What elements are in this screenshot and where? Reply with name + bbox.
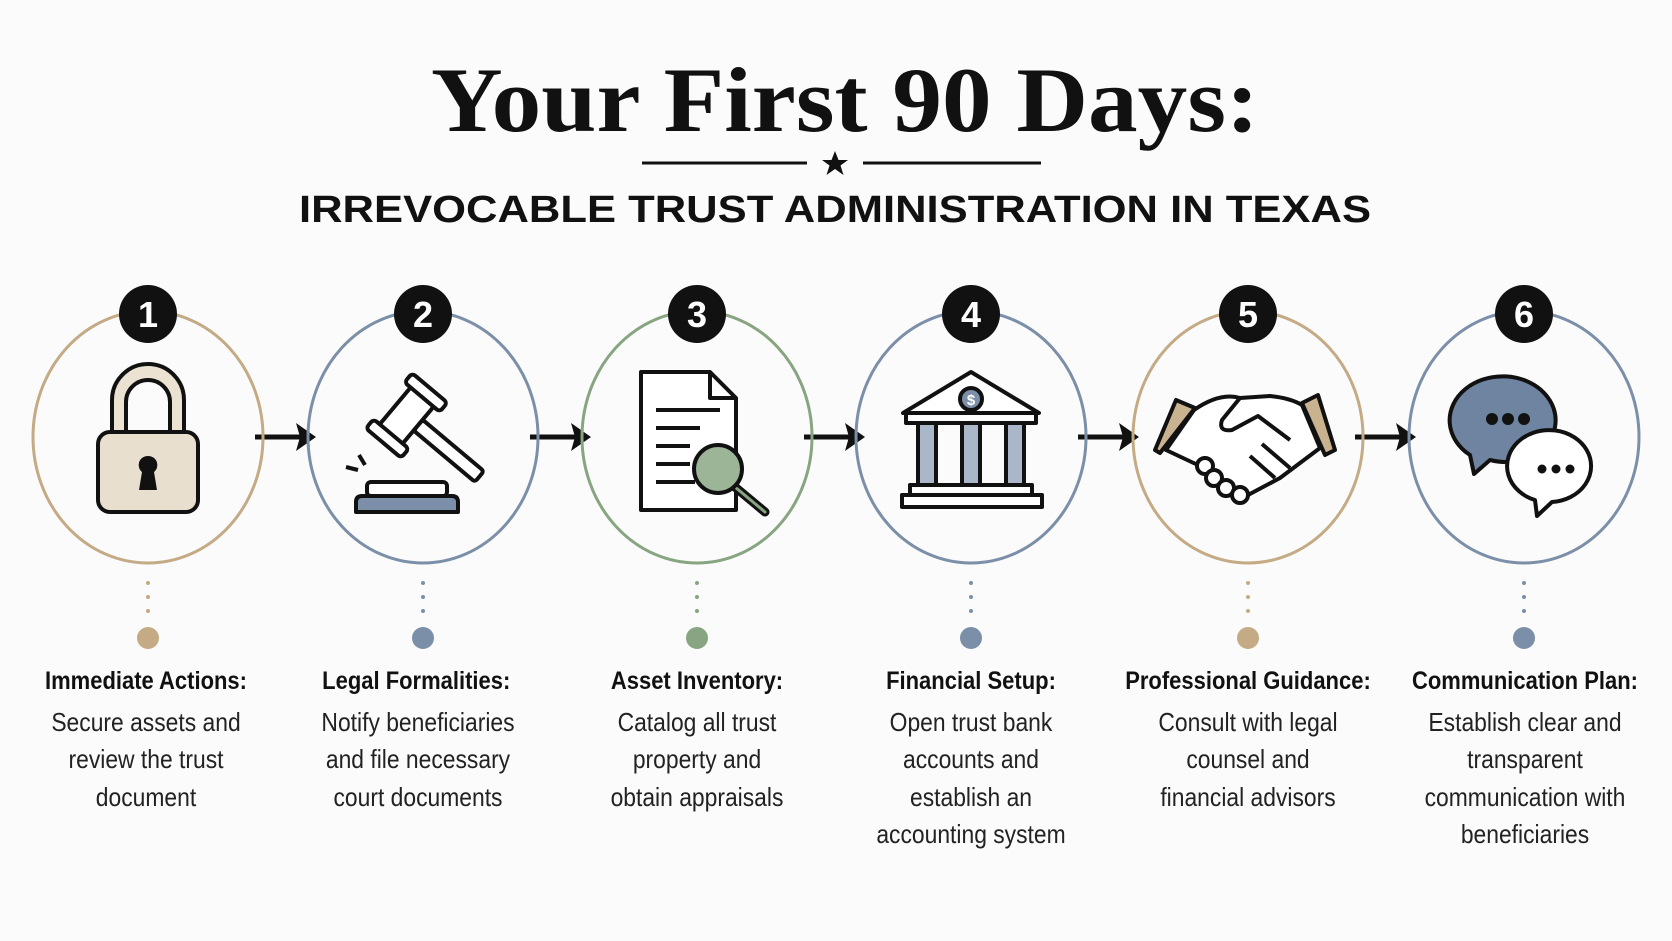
step 1: Immediate Actions	[33, 285, 263, 812]
badge 4: 4	[961, 294, 981, 335]
connector dots 2	[412, 581, 434, 649]
text 5: Professional Guidance:	[1125, 667, 1371, 694]
step 6: Communication Plan	[1409, 285, 1639, 849]
subtitle: IRREVOCABLE TRUST ADMINISTRATION IN TEXAS	[299, 189, 1371, 231]
text 3: Catalog all trust	[618, 709, 777, 737]
icon: handshake	[1155, 395, 1335, 503]
step 2: Legal Formalities	[308, 285, 538, 812]
text 3: property and	[633, 746, 761, 774]
text 4	[876, 667, 1066, 849]
connector dots 6	[1513, 581, 1535, 649]
text 6	[1412, 667, 1638, 849]
text 3	[611, 667, 783, 812]
text 4: accounts and	[903, 746, 1039, 774]
text 6: Communication Plan:	[1412, 667, 1638, 694]
text 2: Notify beneficiaries	[321, 709, 515, 737]
text 6: transparent	[1467, 746, 1583, 774]
title: Your First 90 Days:	[431, 49, 1259, 151]
text 4: Open trust bank	[890, 709, 1053, 737]
text 6: Establish clear and	[1428, 709, 1622, 737]
text 5: Consult with legal	[1158, 709, 1338, 737]
connector dots 5	[1237, 581, 1259, 649]
step 5: Professional Guidance	[1125, 285, 1371, 812]
text 6: communication with	[1425, 784, 1625, 812]
text 1: review the trust	[68, 746, 224, 774]
icon: chat bubbles	[1450, 376, 1591, 516]
text 3: obtain appraisals	[611, 784, 783, 812]
badge 3	[668, 285, 726, 343]
badge 5	[1219, 285, 1277, 343]
text 3: Asset Inventory:	[611, 667, 783, 694]
badge 2	[394, 285, 452, 343]
text 2: and file necessary	[326, 746, 511, 774]
icon: document with magnifier	[641, 372, 765, 512]
arrows between steps	[255, 423, 1416, 451]
text 4: Financial Setup:	[886, 667, 1056, 694]
text 1: Secure assets and	[51, 709, 241, 737]
badge 6: 6	[1514, 294, 1534, 335]
text 2: Legal Formalities:	[322, 667, 510, 694]
badge 2: 2	[413, 294, 433, 335]
badge 5: 5	[1238, 294, 1258, 335]
text 2: court documents	[333, 784, 503, 812]
icon: gavel	[346, 373, 503, 512]
step 3: Asset Inventory	[582, 285, 812, 812]
badge 4	[942, 285, 1000, 343]
badge 6	[1495, 285, 1553, 343]
icon: bank building	[902, 372, 1042, 507]
connector dots 3	[686, 581, 708, 649]
connector dots 1	[137, 581, 159, 649]
icon: bank building: $	[967, 392, 976, 409]
text 2	[321, 667, 515, 812]
divider with star	[642, 151, 1041, 175]
badge 3: 3	[687, 294, 707, 335]
icon: padlock	[98, 364, 198, 512]
text 4: accounting system	[876, 821, 1066, 849]
text 1: document	[96, 784, 196, 812]
connector dots 4	[960, 581, 982, 649]
badge 1: 1	[138, 294, 158, 335]
text 6: beneficiaries	[1461, 821, 1589, 849]
step 4: Financial Setup	[856, 285, 1086, 849]
text 1	[45, 667, 247, 812]
text 5: financial advisors	[1160, 784, 1336, 812]
text 5	[1125, 667, 1371, 812]
text 4: establish an	[910, 784, 1032, 812]
text 1: Immediate Actions:	[45, 667, 247, 694]
badge 1	[119, 285, 177, 343]
text 5: counsel and	[1186, 746, 1310, 774]
